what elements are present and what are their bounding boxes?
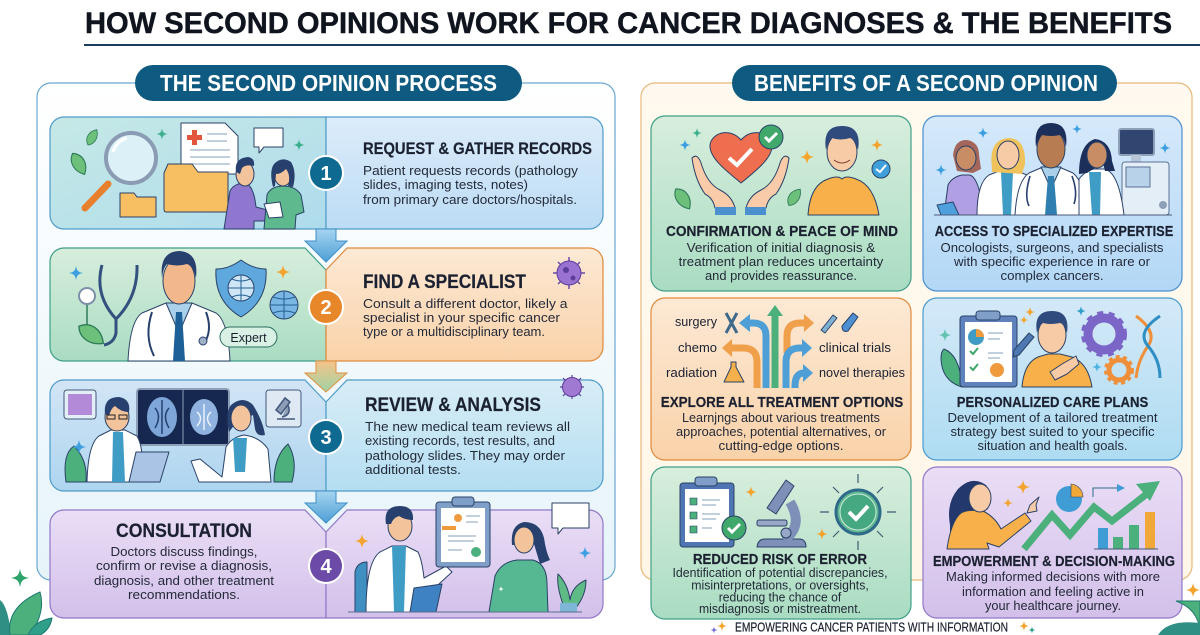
icon: sparkles [745,486,828,540]
benefit card: access to specialized expertise [923,116,1182,291]
icon: small folder [120,193,156,217]
icon: leaves [67,127,305,177]
figure: expert doctor [128,251,230,361]
icon: cupped hands [692,156,789,215]
text: step 2 description: specialist in your specific cancer [363,310,561,325]
description [948,410,1158,453]
heading: the second opinion process: THE SECOND OPINION PROCESS [160,70,497,96]
description: situation and health goals. [978,438,1128,453]
treatment labels: chemo [678,341,717,355]
benefit card: explore all treatment options [651,298,911,460]
figure: happy person [808,126,879,215]
number badge 3 [308,419,344,455]
icon: microscope frame [266,390,301,427]
icon: speech bubble [254,128,283,153]
text: step 3 description [365,419,570,477]
figure: lead doctor [1015,123,1087,215]
description [676,410,887,453]
text: step 3 description: The new medical team reviews all [365,419,570,434]
number badge 2 [308,289,344,325]
number badge 3: 3 [320,427,332,449]
text: step 4 description: Doctors discuss findings, [110,544,258,559]
step 2 card: find a specialist [50,248,603,361]
description [946,569,1160,613]
arrow: step 2 to 3 [305,361,347,392]
step 4 card: consultation [50,497,603,618]
icon: heart with check [710,125,783,183]
description: with specific experience in rare or [953,254,1151,269]
heading: CONFIRMATION & PEACE OF MIND [666,224,898,240]
number badge 1: 1 [320,163,332,185]
heading: benefits of a second opinion [732,65,1117,101]
description: Identification of potential discrepancies, [672,565,888,580]
heading: benefits of a second opinion: BENEFITS OF A SECOND OPINION [754,70,1098,96]
heading: review and analysis: REVIEW & ANALYSIS [365,395,541,416]
step 1 card: request and gather records [50,117,603,229]
description: and provides reassurance. [705,268,857,283]
text: step 2 description: type or a multidisciplinary team. [363,324,545,339]
heading: request and gather records: REQUEST & GATHER RECORDS [363,140,592,158]
figure: patient [224,157,275,229]
heading: EXPLORE ALL TREATMENT OPTIONS [661,395,904,411]
description: misinterpretations, or oversights, [691,578,869,592]
icon: clipboard [960,311,1017,387]
icon: checklist clipboard [680,477,746,547]
icon: sparkle [72,440,86,454]
figure: doctor with dark hair [1079,139,1124,215]
figure: woman pointing [947,481,1039,549]
text: step 1 description [363,163,579,207]
icon: pen [1013,333,1034,357]
step 3 card: review and analysis [50,375,603,491]
description: Development of a tailored treatment [948,410,1158,425]
text: step 4 description: diagnosis, and other treatment [94,573,274,588]
icon: vial [842,313,858,331]
description: Verification of initial diagnosis & [687,240,876,255]
description: strategy best suited to your specific [950,424,1155,439]
arrow: step 1 to 2 [305,229,347,262]
treatment labels: novel therapies [819,366,905,380]
decoration: bottom left leaves [0,569,52,635]
description [672,565,888,616]
panel: second opinion process [37,83,615,580]
text: step 4 description: recommendations. [128,587,240,602]
number badge 4 [308,548,344,584]
icon: medical machine [1119,129,1169,215]
heading: consultation: CONSULTATION [116,521,252,542]
icon: leaf [75,320,108,349]
icon: sparkles [69,265,290,280]
icon: laptop [129,452,169,482]
icon: slide frame [64,390,96,419]
description: treatment plan reduces uncertainty [679,254,884,269]
icon: sparkles [939,306,1102,372]
figure: blonde doctor [977,138,1032,215]
heading: the second opinion process [135,65,522,101]
heading: find a specialist: FIND A SPECIALIST [363,272,526,293]
icon: shield [216,260,266,317]
icon: sparkles [1003,480,1030,508]
arrow: step 3 to 4 [305,491,347,523]
figure: person hand on heart [1022,311,1092,387]
text: step 2 description [363,296,568,339]
description: misdiagnosis or mistreatment. [699,601,861,616]
footer tagline: EMPOWERING CANCER PATIENTS WITH INFORMATION [735,620,1008,634]
description: Learnjngs about various treatments [682,410,880,425]
icon: virus [560,375,584,399]
icon: radiation flask [724,362,744,382]
figure: nurse in purple [937,140,983,215]
description: information and feeling active in [962,584,1144,599]
description: Making informed decisions with more [946,569,1160,584]
icon: globe [270,291,298,319]
chart: branching treatment arrows [722,305,814,388]
text: step 4 description [94,544,274,602]
figure: patient [489,522,550,612]
number badge 1 [308,155,344,191]
chart: bars [1094,512,1158,549]
heading: REDUCED RISK OF ERROR [693,552,867,568]
icon: virus [553,257,585,289]
decoration: bottom right leaves [1158,583,1200,635]
icon: scissors [726,313,737,333]
text: step 3 description: existing records, test results, and [365,433,555,448]
text: step 1 description: slides, imaging tests, notes) [363,177,528,192]
description: Oncologists, surgeons, and specialists [940,240,1164,255]
icon: stethoscope [79,265,137,345]
figure: doctor with tablet [355,506,452,612]
number badge 2: 2 [320,297,332,319]
description [679,240,884,283]
text: step 1 description: Patient requests records (pathology [363,163,579,178]
treatment labels: radiation [666,366,717,380]
figure: nurse [264,159,304,229]
icon: speech bubble [552,503,589,534]
icon: leaves [671,185,804,212]
label: expert [220,327,277,347]
heading: EMPOWERMENT & DECISION-MAKING [933,554,1175,570]
icon: potted plant [558,574,586,612]
text: step 4 description: confirm or revise a diagnosis, [96,558,272,573]
icon: clipboard [436,497,490,567]
panel: benefits [641,83,1192,580]
description: cutting-edge options. [718,438,844,453]
icon: plants [65,444,294,482]
icon: DNA helix [1136,316,1160,378]
text: step 2 description: Consult a different doctor, likely a [363,296,568,311]
icon: magnifying glass [85,133,156,208]
icon: medical document [181,123,238,174]
figure: doctor with laptop [87,397,142,482]
description: reducing the chance of [719,590,842,604]
icon: microscope [757,480,806,547]
icon: brain scan monitor [137,389,229,445]
chart: pie [1056,484,1125,512]
treatment labels: surgery [675,315,718,329]
icon: syringe [821,315,837,333]
text: step 3 description: pathology slides. They may order [365,448,566,463]
label: expert: Expert [230,331,267,345]
description: your healthcare journey. [985,598,1121,613]
description: complex cancers. [1000,268,1104,283]
figure: doctor pointing [191,400,271,482]
icon: large folder [164,164,228,212]
benefit card: empowerment and decision-making [923,467,1182,618]
icon: sparkles [355,534,591,592]
text: step 3 description: additional tests. [365,462,461,477]
text: step 1 description: from primary care doctors/hospitals. [363,192,577,207]
heading: PERSONALIZED CARE PLANS [957,395,1148,411]
description: approaches, potential alternatives, or [676,424,887,439]
number badge 4: 4 [320,556,332,578]
benefit card: personalized care plans [923,298,1182,460]
treatment labels [666,315,905,380]
title: HOW SECOND OPINIONS WORK FOR CANCER DIAGNOSES & THE BENEFITS [85,7,1172,40]
chart: rising arrow [1024,481,1160,549]
benefit card: confirmation and peace of mind [651,116,911,291]
heading: ACCESS TO SPECIALIZED EXPERTISE [935,224,1174,240]
icon: target check [820,474,896,550]
description [940,240,1164,283]
icon: sparkles and check [679,128,890,178]
icon: sparkles [935,124,1171,176]
icon: leaf [941,349,962,387]
treatment labels: clinical trials [819,341,891,355]
benefit card: reduced risk of error [651,467,911,619]
icon: gears [1083,313,1132,384]
